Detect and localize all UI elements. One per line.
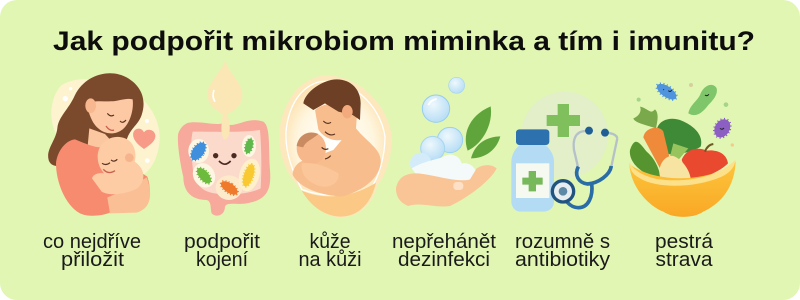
label: podpořit kojení (184, 231, 260, 271)
icon: mother holding baby (48, 73, 160, 216)
label: podpořit kojení: kojení (196, 249, 248, 271)
title: Jak podpořit mikrobiom miminka a tím i imunitu? (53, 26, 755, 56)
label: co nejdříve přiložit: přiložit (61, 249, 124, 271)
label: rozumně s antibiotiky: antibiotiky (515, 249, 610, 271)
label: kůže na kůži: kůže (310, 231, 350, 253)
label: pestrá strava: pestrá (655, 231, 714, 253)
label: nepřehánět dezinfekci (392, 231, 496, 271)
label: rozumně s antibiotiky: rozumně s (515, 231, 610, 253)
label: nepřehánět dezinfekci: nepřehánět (392, 231, 496, 253)
icon: intestine with milk drop and bacteria (178, 60, 270, 216)
label: rozumně s antibiotiky (515, 231, 610, 271)
icon: medicine bottle and stethoscope (511, 92, 617, 212)
label: kůže na kůži (298, 231, 362, 271)
label: co nejdříve přiložit: co nejdříve (43, 231, 141, 253)
label: pestrá strava (655, 231, 714, 271)
icon: bowl of vegetables and fruit with bacteria (629, 81, 736, 217)
label: co nejdříve přiložit (43, 231, 141, 271)
icon: soap bubbles on hand with leaves (396, 77, 500, 206)
label: podpořit kojení: podpořit (184, 231, 260, 253)
label: pestrá strava: strava (656, 249, 713, 271)
label: kůže na kůži: na kůži (298, 249, 362, 271)
icon: skin to skin father and baby (279, 76, 392, 217)
label: nepřehánět dezinfekci: dezinfekci (398, 249, 490, 271)
